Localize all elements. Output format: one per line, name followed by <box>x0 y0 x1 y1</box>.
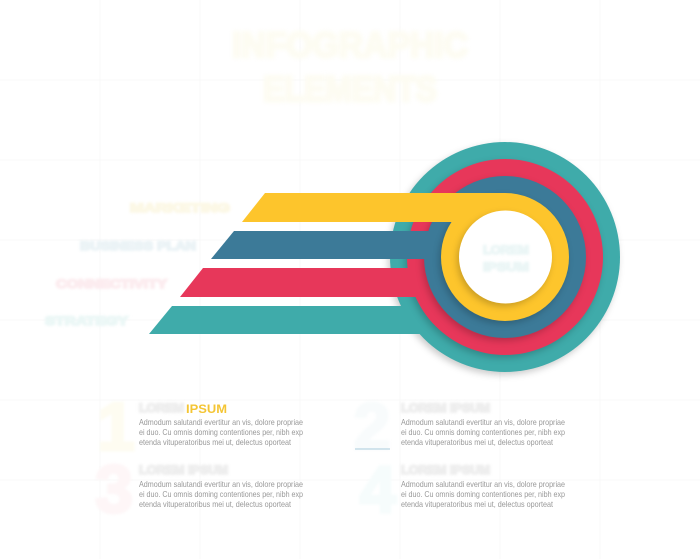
paragraph 1 <box>139 417 303 447</box>
side labels <box>45 201 230 328</box>
number 4: 4 <box>360 452 397 526</box>
title: ELEMENTS <box>263 70 437 109</box>
center label: LOREM <box>483 243 529 257</box>
diagram: concentric rings with bars <box>149 142 620 372</box>
heading 1: LOREM <box>139 401 184 415</box>
paragraph 3: Admodum salutandi evertitur an vis, dolore propriae <box>139 479 303 489</box>
center white circle <box>459 210 552 304</box>
paragraph 2: etenda vituperatoribus mei ut, delectus oporteat <box>401 437 554 447</box>
paragraph 4 <box>401 479 565 509</box>
paragraph 4: ei duo. Cu omnis doming contentiones per, nibh exp <box>401 489 565 499</box>
side labels: MARKETING <box>130 201 230 215</box>
side labels: STRATEGY <box>45 314 128 328</box>
title <box>232 26 468 109</box>
item 2 <box>354 389 565 463</box>
number 2 underline <box>355 448 390 450</box>
paragraph 3 <box>139 479 303 509</box>
paragraph 1: Admodum salutandi evertitur an vis, dolore propriae <box>139 417 303 427</box>
heading 3: LOREM IPSUM <box>139 463 228 477</box>
blue ring and bar <box>211 176 586 338</box>
item 3 <box>95 451 303 527</box>
number 2: 2 <box>354 389 390 463</box>
paragraph 3: etenda vituperatoribus mei ut, delectus oporteat <box>139 499 292 509</box>
red ring and bar <box>180 159 603 355</box>
paragraph 4: etenda vituperatoribus mei ut, delectus oporteat <box>401 499 554 509</box>
paragraph 1: etenda vituperatoribus mei ut, delectus oporteat <box>139 437 292 447</box>
number 3: 3 <box>95 451 133 527</box>
teal ring and bar <box>149 142 620 372</box>
paragraph 2: ei duo. Cu omnis doming contentiones per, nibh exp <box>401 427 565 437</box>
side labels: BUSINESS PLAN <box>80 239 196 253</box>
number 1: 1 <box>97 389 135 465</box>
item 4 <box>360 452 565 526</box>
paragraph 4: Admodum salutandi evertitur an vis, dolore propriae <box>401 479 565 489</box>
side labels: CONNECTIVITY <box>56 277 167 291</box>
paragraph 2: Admodum salutandi evertitur an vis, dolore propriae <box>401 417 565 427</box>
heading 1: IPSUM <box>186 402 227 416</box>
title: INFOGRAPHIC <box>232 26 468 65</box>
paragraph 2 <box>401 417 565 447</box>
item 1 <box>97 389 303 465</box>
center label: IPSUM <box>483 260 529 274</box>
heading 1 <box>139 401 227 416</box>
heading 4: LOREM IPSUM <box>401 463 490 477</box>
paragraph 1: ei duo. Cu omnis doming contentiones per, nibh exp <box>139 427 303 437</box>
heading 2: LOREM IPSUM <box>401 401 490 415</box>
center label <box>483 243 529 274</box>
yellow ring and bar <box>242 193 569 321</box>
paragraph 3: ei duo. Cu omnis doming contentiones per, nibh exp <box>139 489 303 499</box>
